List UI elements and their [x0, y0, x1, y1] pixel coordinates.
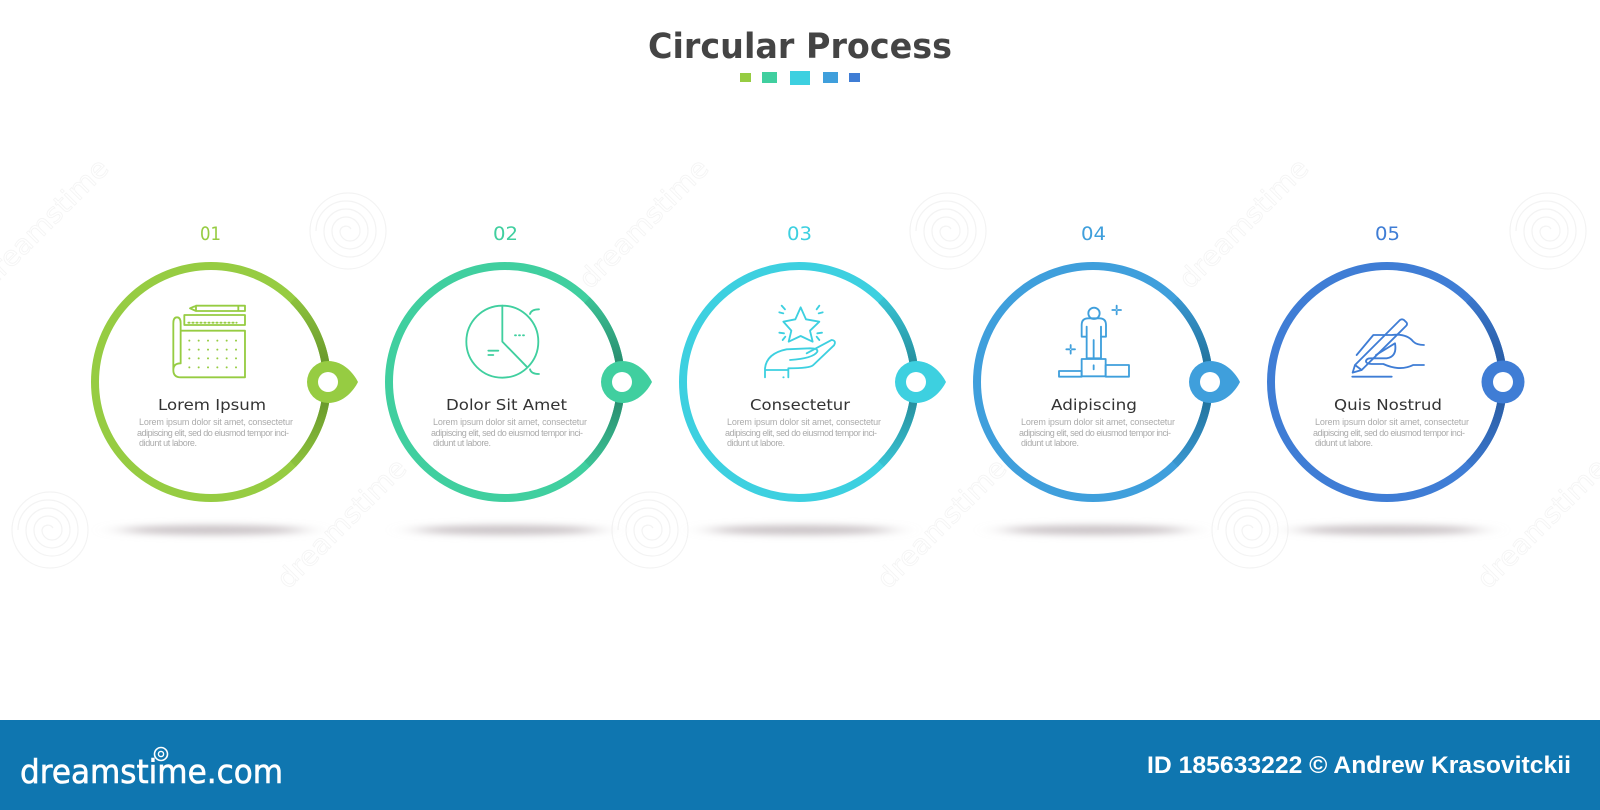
- ring: [977, 266, 1209, 498]
- step 3: [683, 223, 946, 535]
- body text: Lorem ipsum dolor sit amet, consectetur: [433, 417, 587, 427]
- body text: adipiscing elit, sed do eiusmod tempor inci-: [137, 428, 289, 438]
- shadow: [415, 525, 599, 535]
- icon: star in hand: [765, 306, 835, 377]
- body text: Lorem ipsum dolor sit amet, consectetur: [1315, 417, 1469, 427]
- marker: [307, 361, 358, 403]
- number: 02: [493, 223, 518, 245]
- body text: didunt ut labore.: [139, 438, 197, 448]
- icon: person on podium: [1059, 306, 1129, 377]
- heading: Consectetur: [750, 396, 851, 414]
- ring: [683, 266, 915, 498]
- step 5: [1271, 223, 1524, 535]
- ring: [389, 266, 621, 498]
- heading: Dolor Sit Amet: [446, 396, 567, 414]
- footer logo: dreamstime.com: [20, 752, 283, 791]
- icon: pie chart: [466, 306, 539, 378]
- body text: [725, 417, 881, 448]
- icon: hand writing: [1352, 319, 1424, 377]
- shadow: [709, 525, 893, 535]
- step 1: [95, 223, 358, 535]
- body text: didunt ut labore.: [1315, 438, 1373, 448]
- icon: blueprint and ruler: [173, 306, 245, 377]
- shadow: [1003, 525, 1187, 535]
- body text: didunt ut labore.: [727, 438, 785, 448]
- watermarks: [0, 153, 1600, 595]
- step 4: [977, 223, 1240, 535]
- heading: Quis Nostrud: [1334, 396, 1442, 414]
- body text: [1313, 417, 1469, 448]
- number: 05: [1375, 223, 1400, 245]
- step 2: [389, 223, 652, 535]
- ring: [95, 266, 327, 498]
- title colour squares: [740, 71, 860, 85]
- body text: Lorem ipsum dolor sit amet, consectetur: [727, 417, 881, 427]
- marker: [601, 361, 652, 403]
- watermarks: dreamstime: [1173, 153, 1315, 295]
- marker: [1189, 361, 1240, 403]
- ring: [1271, 266, 1503, 498]
- body text: adipiscing elit, sed do eiusmod tempor inci-: [1313, 428, 1465, 438]
- body text: Lorem ipsum dolor sit amet, consectetur: [139, 417, 293, 427]
- shadow: [1297, 525, 1481, 535]
- number: 04: [1081, 223, 1106, 245]
- body text: adipiscing elit, sed do eiusmod tempor inci-: [725, 428, 877, 438]
- number: 03: [787, 223, 812, 245]
- body text: [1019, 417, 1175, 448]
- body text: didunt ut labore.: [433, 438, 491, 448]
- watermarks: dreamstime: [573, 153, 715, 295]
- heading: Adipiscing: [1051, 396, 1137, 414]
- body text: [431, 417, 587, 448]
- number: 01: [200, 223, 221, 245]
- title: Circular Process: [648, 27, 952, 67]
- marker: [895, 361, 946, 403]
- heading: Lorem Ipsum: [158, 396, 266, 414]
- body text: adipiscing elit, sed do eiusmod tempor inci-: [1019, 428, 1171, 438]
- marker: [1482, 360, 1524, 404]
- footer banner: [0, 720, 1600, 810]
- body text: adipiscing elit, sed do eiusmod tempor inci-: [431, 428, 583, 438]
- image id and author: ID 185633222 © Andrew Krasovitckii: [1147, 752, 1571, 779]
- body text: didunt ut labore.: [1021, 438, 1079, 448]
- watermarks: dreamstime: [871, 453, 1013, 595]
- watermarks: dreamstime: [271, 453, 413, 595]
- body text: [137, 417, 293, 448]
- shadow: [121, 525, 305, 535]
- body text: Lorem ipsum dolor sit amet, consectetur: [1021, 417, 1175, 427]
